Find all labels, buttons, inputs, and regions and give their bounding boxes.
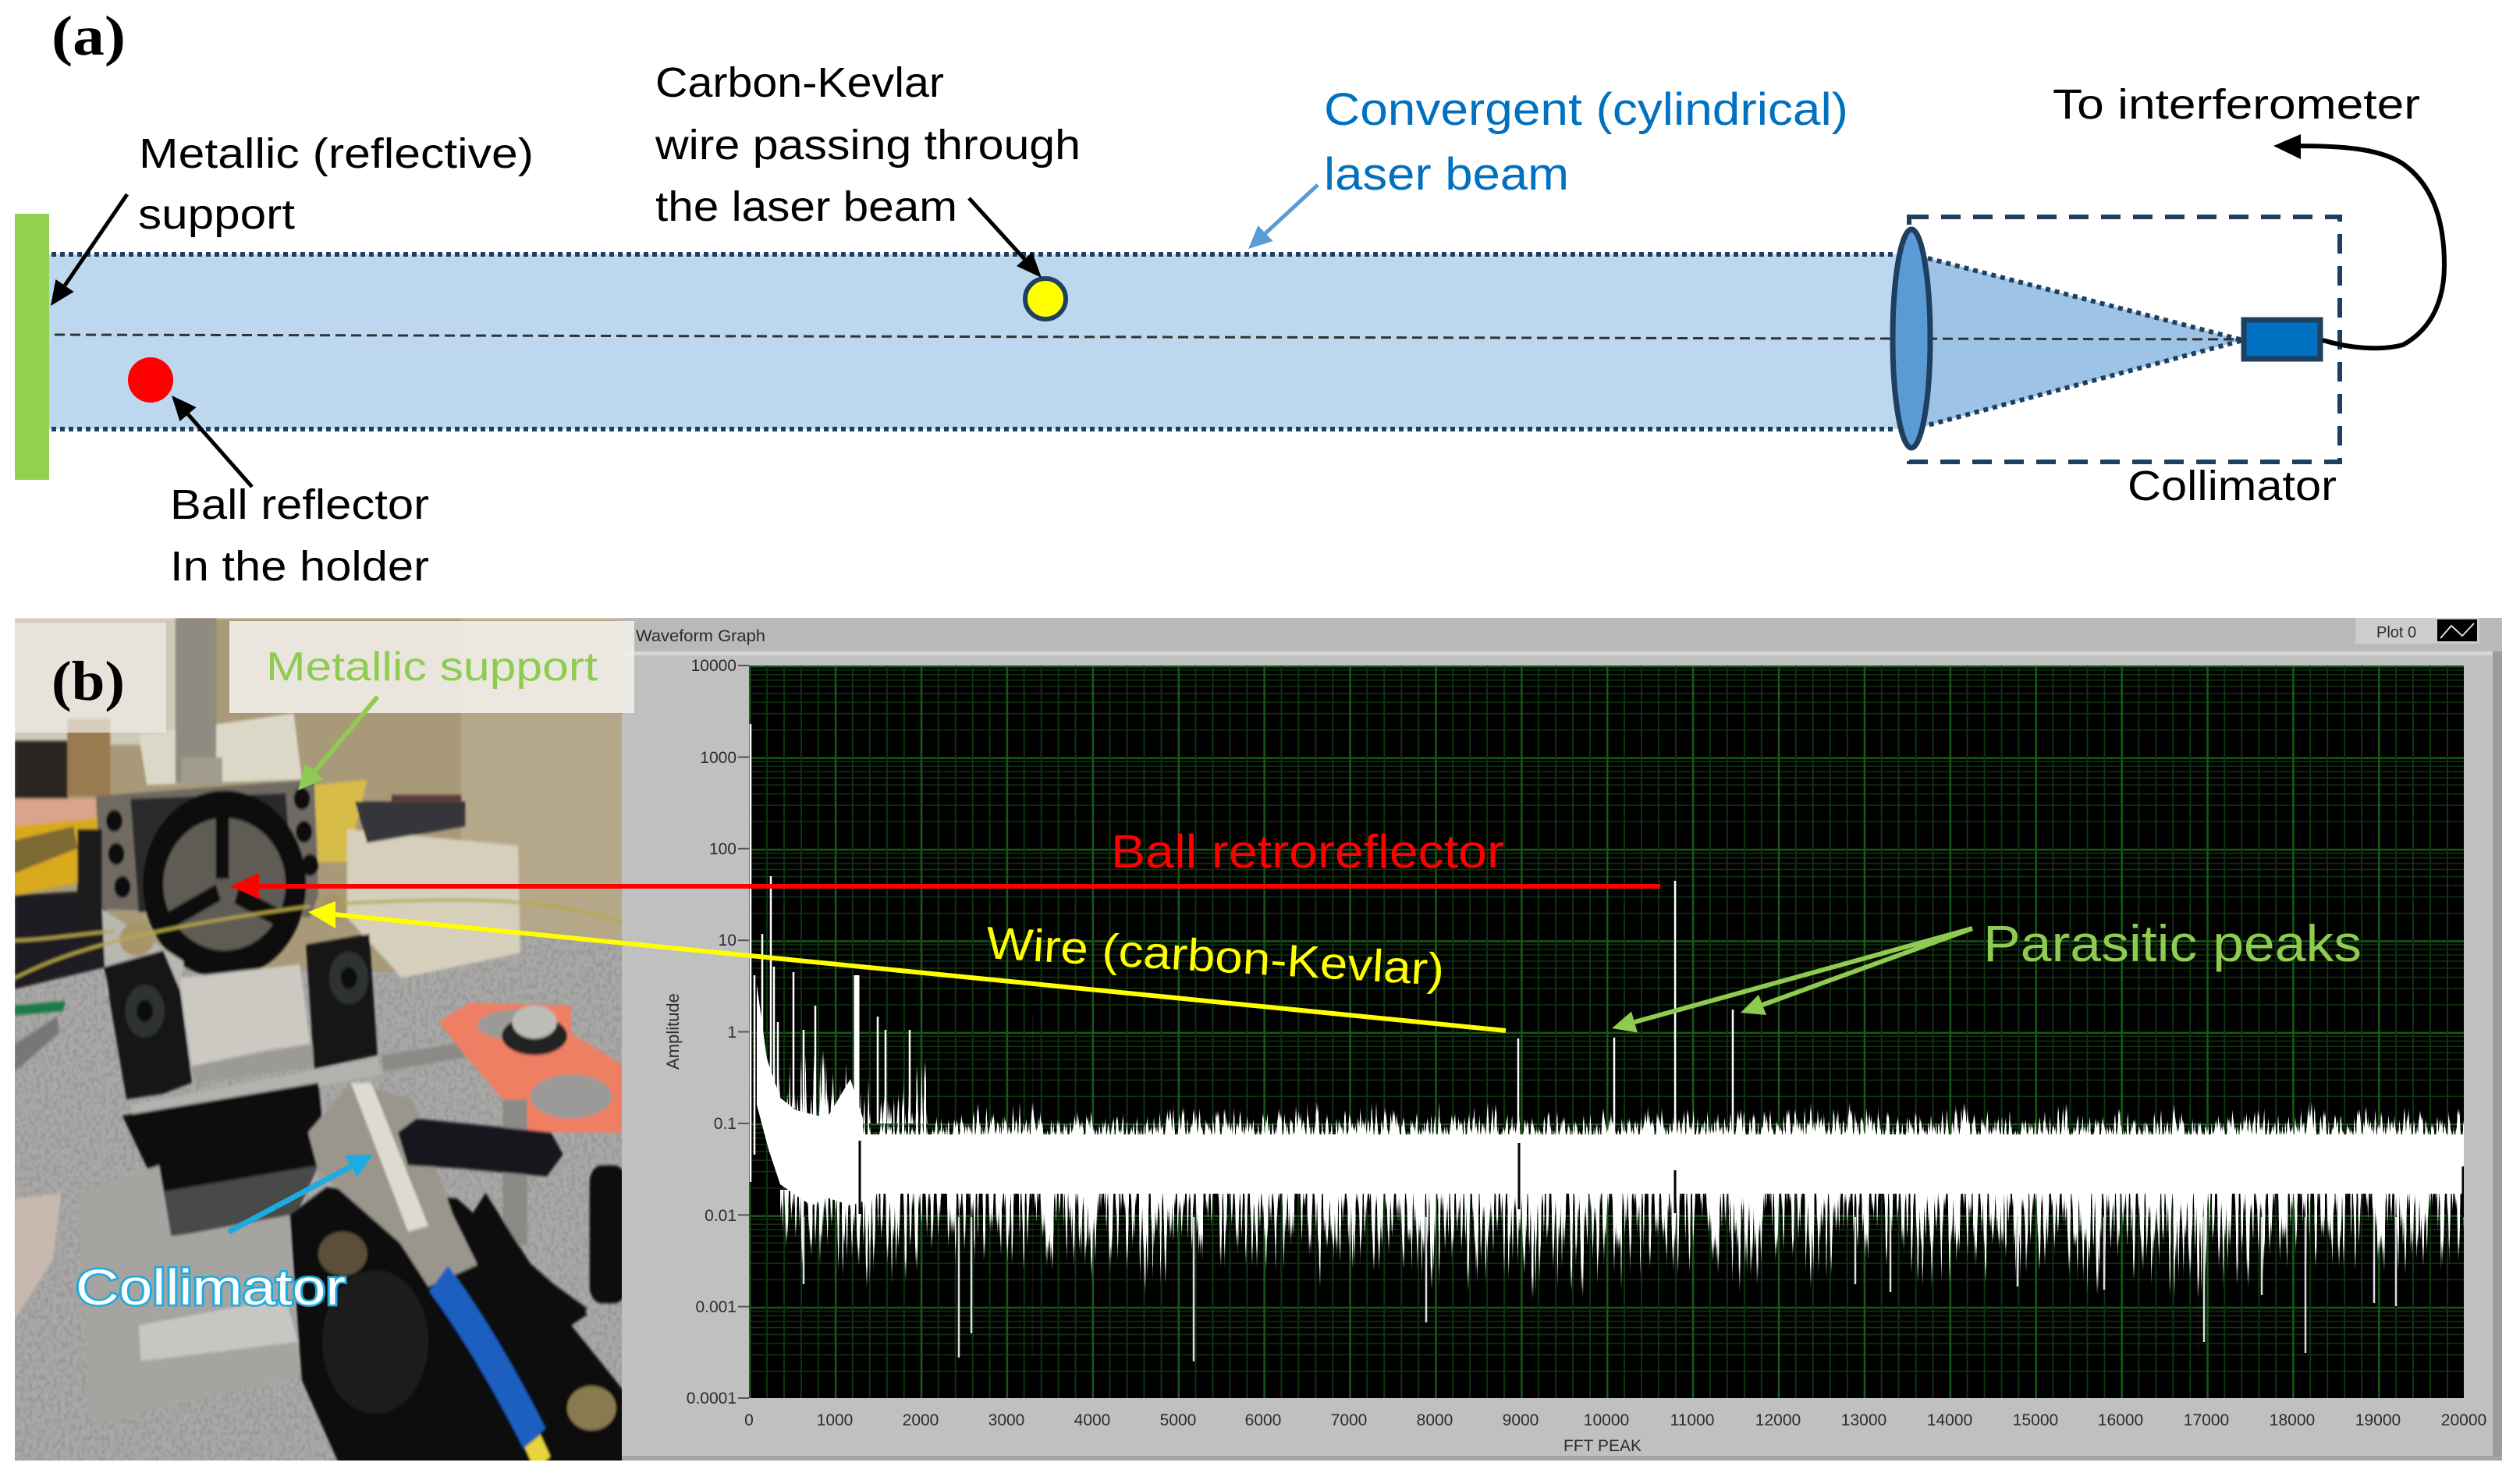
panel a: beam schematic xyxy=(15,5,2444,590)
arrow: metallic support xyxy=(298,697,378,790)
y axis labels: 0.0001 xyxy=(687,1390,736,1407)
x axis labels: 20000 xyxy=(2441,1411,2486,1429)
prominent peaks xyxy=(751,724,1733,1182)
y axis labels: 10 xyxy=(719,932,736,949)
y axis labels: 1000 xyxy=(700,749,736,767)
arrow: collimator xyxy=(229,1155,373,1232)
plot legend xyxy=(2355,618,2479,644)
y axis title: Amplitude xyxy=(663,993,683,1070)
label: wire: Wire (carbon-Kevlar) xyxy=(985,918,1446,996)
x axis labels: 14000 xyxy=(1927,1411,1972,1429)
graph window background xyxy=(622,618,2502,1461)
upper noise fringe xyxy=(858,1102,2464,1136)
label box: metallic support: Metallic support xyxy=(266,644,598,690)
label: ball reflector xyxy=(170,481,429,590)
fiber collimator block xyxy=(2244,320,2320,359)
x axis labels: 5000 xyxy=(1160,1411,1196,1429)
notches in band xyxy=(860,1141,2463,1217)
x axis labels: 13000 xyxy=(1841,1411,1886,1429)
x axis labels: 4000 xyxy=(1074,1411,1110,1429)
collimator dashed frame xyxy=(1909,217,2340,462)
x axis labels: 11000 xyxy=(1670,1411,1714,1429)
x axis title: FFT PEAK xyxy=(1563,1437,1642,1455)
arrow: wire xyxy=(308,901,1506,1031)
label: metallic support xyxy=(138,130,534,238)
label: to interferometer: To interferometer xyxy=(2053,81,2420,128)
label box: panel b: (b) xyxy=(51,650,125,712)
y axis labels: 10000 xyxy=(691,657,736,675)
x axis labels: 9000 xyxy=(1503,1411,1539,1429)
y axis labels: 1 xyxy=(727,1024,736,1042)
y axis labels: 0.001 xyxy=(695,1298,736,1316)
x axis labels: 16000 xyxy=(2098,1411,2143,1429)
label: metallic support: support xyxy=(138,191,295,238)
panel b: waveform graph xyxy=(622,618,2502,1461)
arrow to wire xyxy=(969,198,1042,278)
y axis labels: 0.1 xyxy=(714,1115,736,1133)
arrow to support xyxy=(51,194,127,306)
label box: metallic support xyxy=(229,621,634,713)
label: convergent beam: Convergent (cylindrical) xyxy=(1324,84,1848,135)
x axis labels: 1000 xyxy=(817,1411,853,1429)
y axis labels: 0.01 xyxy=(705,1207,736,1225)
collimated laser beam xyxy=(49,254,1914,429)
arrow to beam xyxy=(1248,185,1318,249)
label: metallic support: Metallic (reflective) xyxy=(139,130,534,177)
x axis labels xyxy=(744,1411,2486,1429)
label: carbon-kevlar wire: Carbon-Kevlar xyxy=(655,59,944,106)
metallic reflective support bar xyxy=(15,214,49,480)
x axis labels: 10000 xyxy=(1584,1411,1629,1429)
label: ball reflector: Ball reflector xyxy=(170,481,429,528)
deep dips xyxy=(804,1217,2396,1361)
label: collimator: Collimator xyxy=(2128,463,2337,509)
fibre arrow to interferometer xyxy=(2273,134,2444,348)
label: ball retroreflector: Ball retroreflector xyxy=(1111,825,1504,878)
lower noise fringe xyxy=(780,1190,2464,1299)
x axis labels: 17000 xyxy=(2184,1411,2229,1429)
arrows: parasitic peaks xyxy=(1612,928,1972,1033)
noise floor core xyxy=(862,1134,2464,1194)
label: convergent beam xyxy=(1324,84,1848,200)
x axis labels: 18000 xyxy=(2270,1411,2315,1429)
wire cross-section xyxy=(1025,279,1066,319)
spectrum trace xyxy=(751,724,2464,1361)
arrow: ball retroreflector xyxy=(230,873,1660,899)
converging cone xyxy=(1923,257,2243,427)
photo of experimental setup xyxy=(15,618,626,1463)
plot legend: Plot 0 xyxy=(2376,624,2416,641)
plot area xyxy=(749,666,2464,1398)
spiky left section xyxy=(772,1045,928,1123)
lens xyxy=(1893,229,1930,448)
x axis labels: 0 xyxy=(744,1411,754,1429)
label: carbon-kevlar wire xyxy=(655,59,1081,230)
label: carbon-kevlar wire: wire passing through xyxy=(655,122,1081,169)
x axis labels: 8000 xyxy=(1417,1411,1453,1429)
x axis labels: 7000 xyxy=(1331,1411,1367,1429)
x axis labels: 2000 xyxy=(903,1411,939,1429)
label: collimator in photo: Collimator xyxy=(76,1259,346,1315)
x axis labels: 15000 xyxy=(2013,1411,2058,1429)
y axis labels xyxy=(687,657,749,1407)
panel label (a): (a) xyxy=(51,5,126,67)
x axis labels: 12000 xyxy=(1755,1411,1801,1429)
label: parasitic peaks: Parasitic peaks xyxy=(1983,914,2362,972)
label box: panel b xyxy=(15,623,166,733)
ball reflector xyxy=(128,357,173,403)
x axis labels: 6000 xyxy=(1245,1411,1281,1429)
label: carbon-kevlar wire: the laser beam xyxy=(655,183,957,230)
arrow to ball xyxy=(172,396,252,487)
label: convergent beam: laser beam xyxy=(1324,149,1569,200)
x axis labels: 19000 xyxy=(2355,1411,2401,1429)
y axis labels: 100 xyxy=(709,840,736,858)
graph title: Waveform Graph xyxy=(636,627,765,645)
x axis labels: 3000 xyxy=(988,1411,1024,1429)
optical axis xyxy=(55,335,2243,339)
label: ball reflector: In the holder xyxy=(170,543,429,590)
